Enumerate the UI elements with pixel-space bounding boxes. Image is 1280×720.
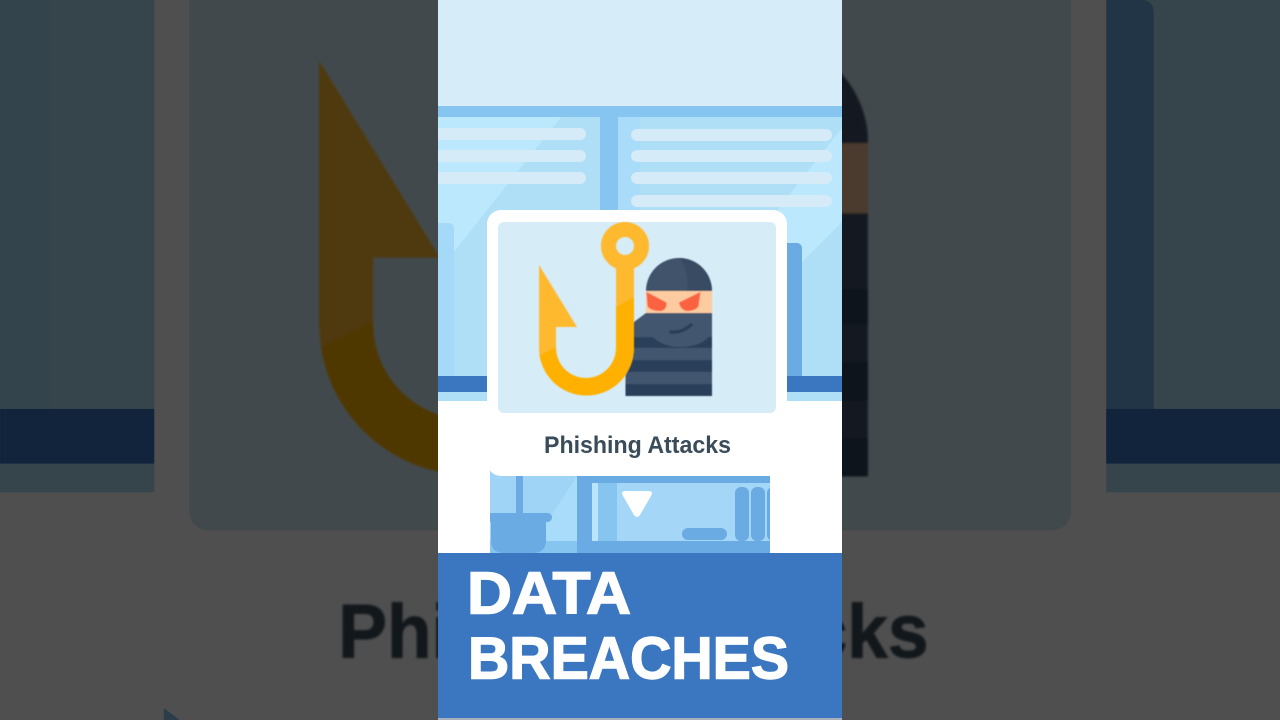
title line 1: DATA [467,560,631,626]
title banner [438,553,842,720]
triangle icon [622,491,652,517]
left text lines [438,128,586,184]
card image area [498,222,776,413]
wall above the window [438,0,842,107]
left column [438,223,454,376]
pill [682,528,727,540]
icon: fish hook [539,230,642,396]
window sill [438,376,842,401]
title line 2: BREACHES [468,626,789,692]
blurred dark background: enlarged scene: Phishing Attacks [338,589,928,674]
icon: masked robber [626,258,712,396]
panel: central vertical scene [438,0,842,553]
right text lines [631,129,832,207]
plant pot [490,476,552,553]
right column [787,243,802,376]
card label: Phishing Attacks [544,432,731,459]
books [735,487,770,541]
card [487,210,787,476]
shelf behind card [490,470,770,553]
window [438,106,842,392]
